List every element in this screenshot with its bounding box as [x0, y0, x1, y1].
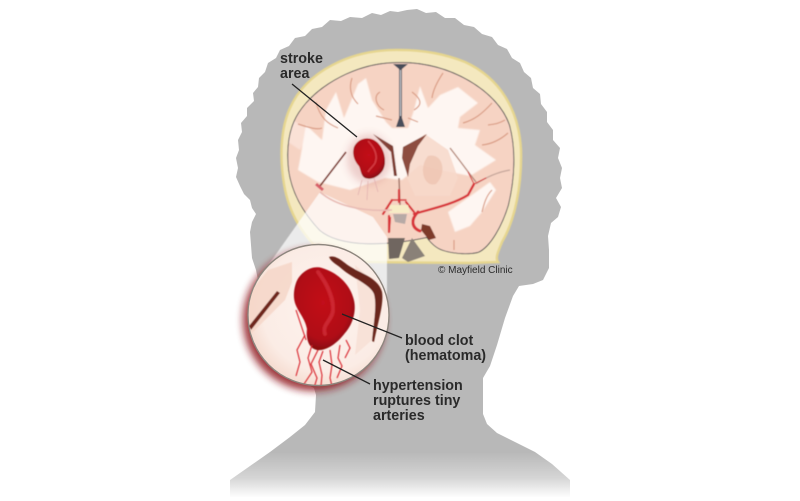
label: stroke area: [280, 51, 357, 137]
label: stroke area: area: [280, 66, 310, 82]
label: blood clot: [342, 314, 486, 364]
insular fissure left: [320, 152, 346, 186]
cerebellum base: [388, 238, 405, 259]
pons yellow patch: [389, 205, 410, 213]
credit: © Mayfield Clinic: [438, 265, 513, 276]
cortex tint left: [248, 262, 292, 335]
label: hypertension: ruptures tiny: [373, 393, 460, 409]
label: hypertension: [323, 360, 463, 424]
cortex tint right: [355, 265, 378, 355]
zoom beam: [262, 192, 387, 300]
stroke clot halo: [347, 134, 391, 184]
ventricles: [373, 134, 397, 176]
bottom fade: [225, 452, 575, 498]
label: blood clot: blood clot: [405, 333, 474, 349]
tiny rupture lines: [358, 178, 378, 200]
basal ganglia tint: [408, 134, 456, 174]
magnified circle: [243, 244, 389, 391]
stroke clot: [353, 138, 385, 179]
sulci: [298, 73, 508, 250]
skull: [282, 50, 521, 263]
label: stroke area: stroke: [280, 51, 323, 67]
head silhouette: [225, 9, 575, 501]
left faded artery: [320, 192, 392, 210]
longitudinal fissure: [393, 64, 408, 127]
inner dura: [288, 63, 513, 253]
label: blood clot: (hematoma): [405, 348, 486, 364]
ruptured arteries: [296, 310, 350, 388]
sulci: [249, 291, 280, 330]
coronal brain section: [262, 50, 521, 300]
clot: [294, 267, 355, 350]
label: hypertension: hypertension: [373, 378, 463, 394]
thalamic arteries: [383, 172, 486, 232]
white matter: [285, 78, 496, 232]
insular fissure right: [450, 148, 476, 182]
cortex and white matter: [288, 62, 514, 254]
red glow: [243, 249, 385, 391]
label: hypertension: arteries: [373, 408, 425, 424]
